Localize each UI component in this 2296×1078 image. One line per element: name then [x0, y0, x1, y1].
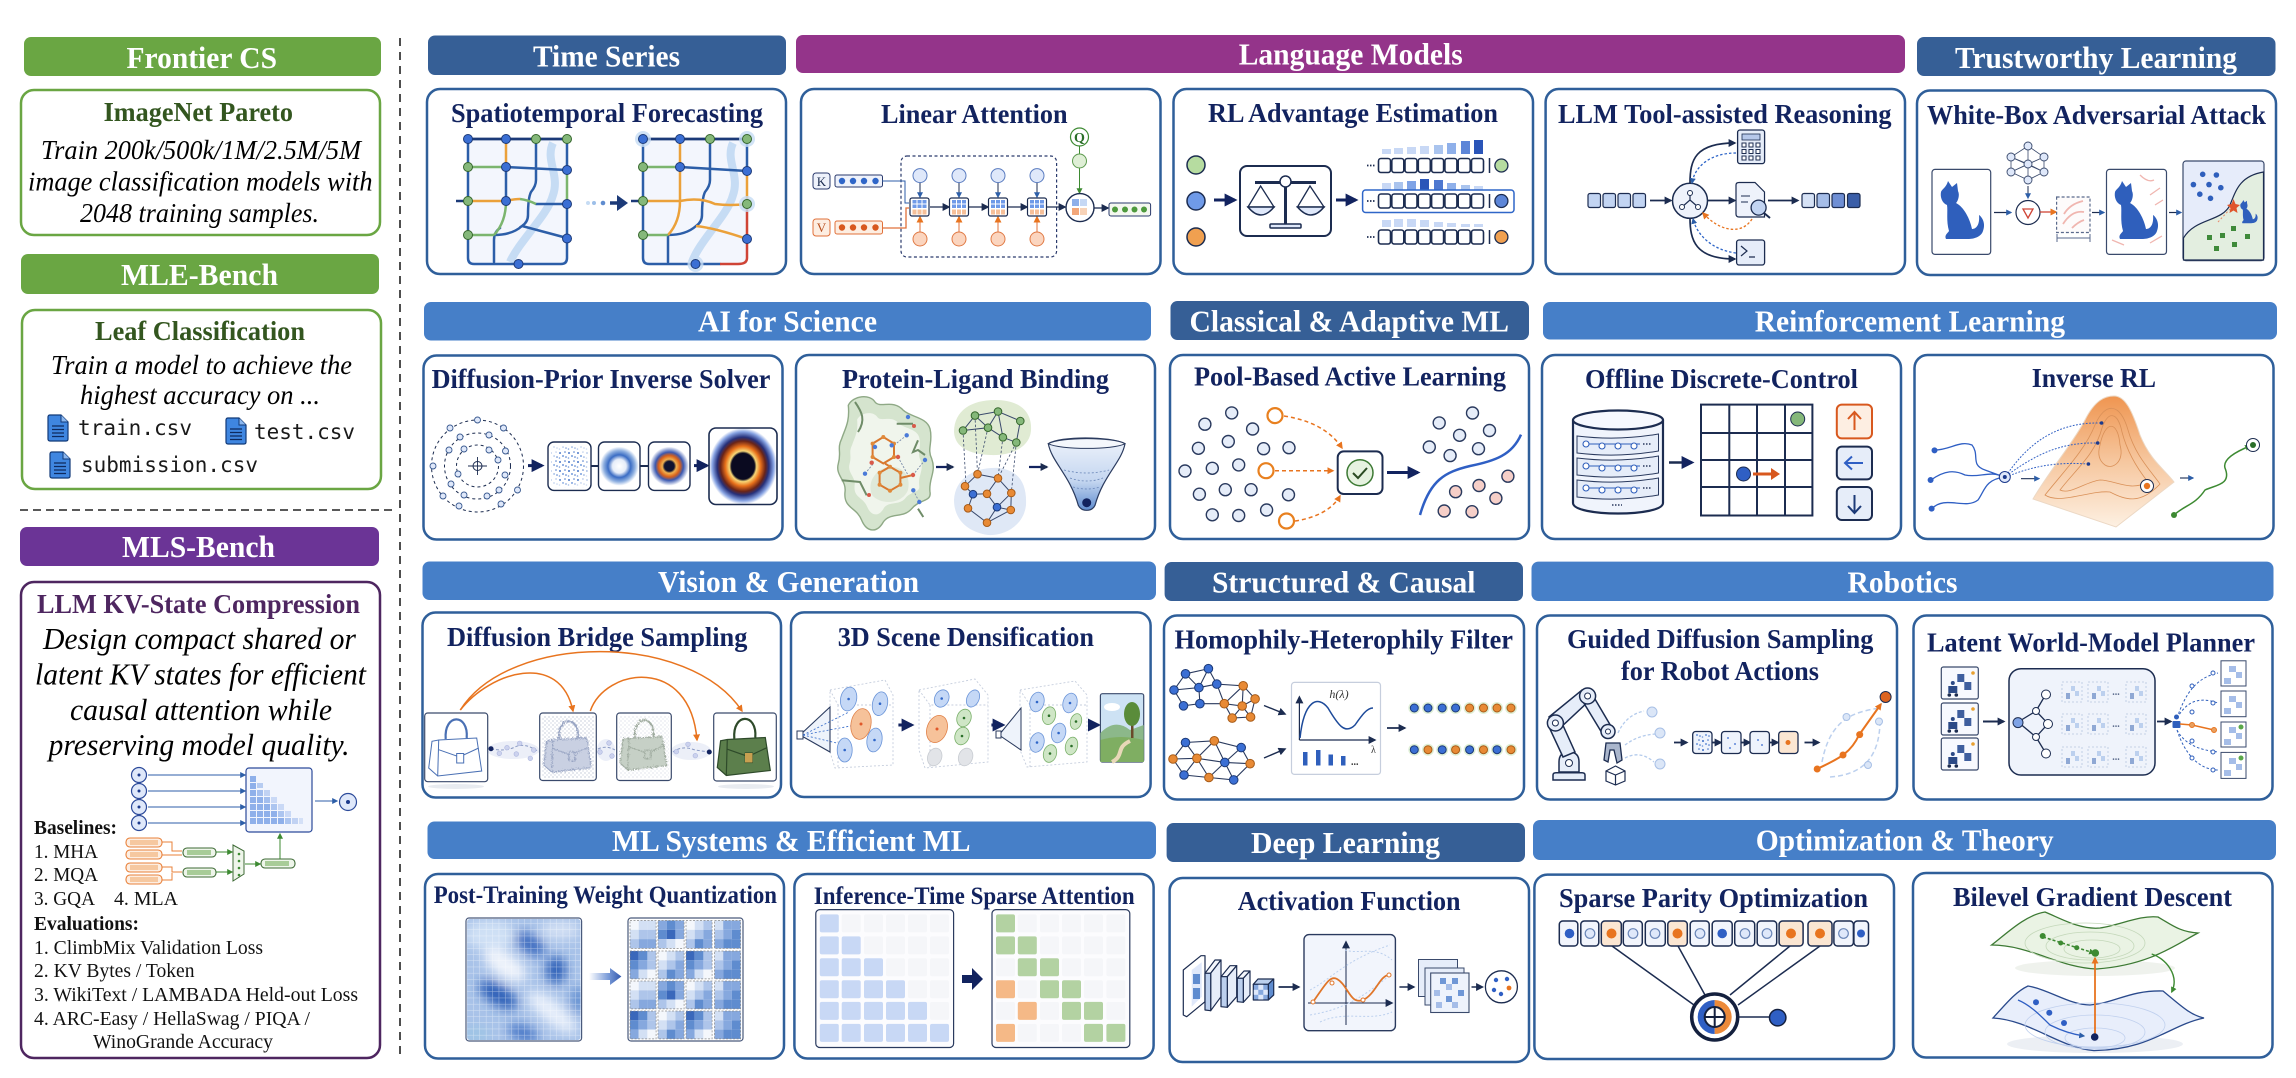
road network forecast — [631, 131, 755, 272]
panel: White-Box Adversarial Attack — [1917, 90, 2276, 275]
title: Linear Attention — [881, 99, 1068, 129]
panel: Diffusion-Prior Inverse Solver — [424, 356, 782, 540]
diagram: bilevel surfaces — [1992, 912, 2204, 1053]
title: Post-Training Weight Quantization — [434, 882, 777, 909]
diagram: linear attention pipeline: V — [817, 220, 827, 235]
diagram: graph spectral filter: h(λ) — [1329, 687, 1349, 701]
file: train.csv: train.csv — [78, 416, 192, 440]
header: Structured & Causal: Structured & Causal — [1212, 564, 1476, 600]
panel: Bilevel Gradient Descent — [1913, 873, 2272, 1058]
diagram: adversarial attack — [1932, 142, 2264, 261]
diagram: offline dataset to grid — [1573, 405, 1872, 520]
header: Robotics — [1532, 562, 2274, 601]
diagram: sparse parity — [1559, 921, 1868, 1040]
baselines list — [34, 817, 179, 910]
baselines list: 4. MLA — [114, 888, 179, 910]
header: Deep Learning — [1167, 823, 1525, 862]
header: Frontier CS: Frontier CS — [126, 40, 277, 75]
evaluations list: 3. WikiText / LAMBADA Held-out Loss — [34, 984, 358, 1006]
header: Deep Learning: Deep Learning — [1251, 825, 1440, 860]
header: Time Series — [428, 36, 786, 75]
heatmap: original weights — [462, 918, 585, 1046]
matrix: sparse attention — [992, 910, 1130, 1048]
panel: Post-Training Weight Quantization — [425, 874, 784, 1058]
panel: Spatiotemporal Forecasting — [427, 89, 786, 274]
diagram: CNN with learned activation — [1183, 935, 1517, 1031]
title: Inference-Time Sparse Attention — [814, 883, 1135, 910]
header: Classical & Adaptive ML: Classical & Adaptive ML — [1190, 304, 1509, 339]
diagram: robot arm sampling — [1547, 688, 1891, 785]
panel: Activation Function — [1170, 878, 1529, 1062]
title: Guided Diffusion Sampling — [1567, 624, 1874, 654]
task description — [51, 350, 352, 410]
header: Reinforcement Learning: Reinforcement Learning — [1755, 304, 2065, 339]
task description: Train 200k/500k/1M/2.5M/5M — [41, 135, 362, 165]
header: MLE-Bench — [21, 254, 379, 294]
header: Optimization & Theory: Optimization & Theory — [1756, 823, 2054, 858]
arrow — [962, 968, 983, 990]
title: RL Advantage Estimation — [1208, 98, 1498, 128]
title: for Robot Actions — [1621, 656, 1819, 686]
horizontal divider — [20, 509, 397, 511]
header: Vision & Generation: Vision & Generation — [658, 564, 919, 599]
arrow — [589, 968, 621, 985]
task description: Design compact shared or — [42, 621, 357, 656]
task description: causal attention while — [70, 692, 332, 727]
title: Inverse RL — [2032, 363, 2156, 393]
task description: Train a model to achieve the — [51, 350, 352, 380]
baselines list: Baselines: — [34, 817, 117, 839]
panel: Protein-Ligand Binding — [796, 355, 1155, 539]
diagram: gaussian densification — [797, 679, 1144, 768]
diagram: world model planning: ... — [2112, 719, 2120, 730]
panel: Linear Attention — [801, 89, 1160, 274]
header: Language Models — [796, 35, 1905, 73]
diagram: KV attention compression — [126, 768, 356, 884]
diagram: tool routing — [1588, 130, 1860, 265]
header: Robotics: Robotics — [1848, 564, 1958, 600]
panel: LLM KV-State Compression — [21, 582, 380, 1058]
header: ML Systems & Efficient ML — [428, 822, 1156, 859]
task description: preserving model quality. — [47, 727, 349, 762]
title: Spatiotemporal Forecasting — [451, 98, 763, 128]
title: Leaf Classification: Leaf Classification — [95, 316, 305, 346]
file: test.csv: test.csv — [254, 420, 355, 444]
diagram: bag bridge — [425, 652, 776, 789]
title: White-Box Adversarial Attack — [1927, 100, 2266, 130]
header: MLE-Bench: MLE-Bench — [121, 257, 278, 292]
diagram: scale and value rows — [1187, 140, 1514, 246]
panel: Inverse RL — [1914, 355, 2274, 539]
header: Optimization & Theory — [1533, 820, 2276, 860]
title: Latent World-Model Planner — [1927, 628, 2255, 658]
evaluations list — [34, 913, 358, 1053]
evaluations list: WinoGrande Accuracy — [93, 1031, 273, 1053]
panel: RL Advantage Estimation — [1174, 89, 1533, 274]
evaluations list: 1. ClimbMix Validation Loss — [34, 937, 263, 959]
diagram: graph spectral filter — [1169, 664, 1517, 784]
matrix: full attention — [816, 910, 954, 1048]
header: Reinforcement Learning — [1543, 302, 2277, 340]
title: Sparse Parity Optimization — [1559, 883, 1868, 913]
header: AI for Science — [424, 302, 1151, 340]
title: 3D Scene Densification — [838, 622, 1094, 652]
diagram: pool sampling — [1179, 407, 1521, 528]
vertical divider — [399, 38, 401, 1058]
task description: latent KV states for efficient — [35, 656, 367, 692]
diagram: graph spectral filter: λ — [1371, 745, 1376, 756]
diagram: diffusion inverse solver — [430, 417, 777, 512]
header: MLS-Bench: MLS-Bench — [122, 529, 275, 564]
task description: 2048 training samples. — [80, 198, 319, 228]
header: Language Models: Language Models — [1239, 37, 1463, 72]
panel: Pool-Based Active Learning — [1170, 355, 1529, 539]
title — [1567, 624, 1874, 686]
title: LLM KV-State Compression: LLM KV-State Compression — [37, 589, 360, 619]
evaluations list: 4. ARC-Easy / HellaSwag / PIQA / — [34, 1008, 310, 1030]
title: Diffusion Bridge Sampling — [447, 622, 748, 652]
title: Bilevel Gradient Descent — [1953, 882, 2232, 912]
diagram: world model planning: ... — [2112, 687, 2120, 698]
panel: Latent World-Model Planner — [1914, 616, 2272, 800]
task description: image classification models with — [28, 166, 372, 196]
baselines list: 1. MHA — [34, 841, 99, 863]
panel: Leaf Classification — [22, 310, 381, 489]
header: Time Series: Time Series — [533, 38, 680, 74]
road network before — [456, 134, 572, 268]
diagram: world model planning — [1941, 661, 2246, 778]
evaluations list: Evaluations: — [34, 913, 139, 935]
diagram: linear attention pipeline: K — [817, 174, 827, 189]
task description — [35, 621, 367, 762]
diagram: protein binding — [838, 397, 1125, 535]
panel: 3D Scene Densification — [791, 612, 1151, 797]
baselines list: 3. GQA — [34, 888, 96, 910]
diagram: graph spectral filter: ... — [1351, 757, 1359, 768]
title: Activation Function — [1238, 886, 1461, 916]
diagram: linear attention pipeline — [813, 128, 1151, 257]
arrow — [586, 195, 628, 211]
header: Frontier CS — [24, 37, 381, 76]
file: submission.csv: submission.csv — [81, 453, 258, 477]
title: LLM Tool-assisted Reasoning — [1558, 99, 1892, 129]
panel: Homophily-Heterophily Filter — [1164, 616, 1524, 800]
diagram: inverse RL reward surface — [1928, 396, 2260, 527]
panel: Offline Discrete-Control — [1542, 355, 1901, 539]
title: Protein-Ligand Binding — [842, 364, 1109, 394]
header: AI for Science: AI for Science — [698, 304, 877, 339]
panel: Sparse Parity Optimization — [1534, 875, 1894, 1059]
diagram: linear attention pipeline: Q — [1074, 131, 1085, 146]
panel: Guided Diffusion Sampling for Robot Actions — [1537, 616, 1897, 800]
panel: Diffusion Bridge Sampling — [422, 612, 781, 798]
evaluations list: 2. KV Bytes / Token — [34, 960, 194, 982]
title: Offline Discrete-Control — [1585, 364, 1858, 394]
title: ImageNet Pareto: ImageNet Pareto — [104, 97, 293, 127]
title: Diffusion-Prior Inverse Solver — [432, 364, 770, 394]
panel: LLM Tool-assisted Reasoning — [1546, 89, 1905, 274]
header: ML Systems & Efficient ML: ML Systems & Efficient ML — [612, 823, 970, 858]
header: Structured & Causal — [1165, 562, 1523, 601]
header: MLS-Bench — [20, 527, 379, 566]
baselines list: 2. MQA — [34, 864, 99, 886]
title: Pool-Based Active Learning — [1194, 362, 1506, 392]
heatmap: quantized blocks — [628, 918, 743, 1041]
task description — [28, 135, 372, 228]
task description: highest accuracy on ... — [80, 380, 320, 410]
header: Trustworthy Learning: Trustworthy Learning — [1955, 40, 2237, 75]
title: Homophily-Heterophily Filter — [1174, 624, 1513, 654]
panel: Inference-Time Sparse Attention — [794, 874, 1154, 1058]
diagram: world model planning: ... — [2112, 752, 2120, 763]
panel: ImageNet Pareto — [21, 90, 380, 235]
header: Vision & Generation — [422, 562, 1156, 600]
